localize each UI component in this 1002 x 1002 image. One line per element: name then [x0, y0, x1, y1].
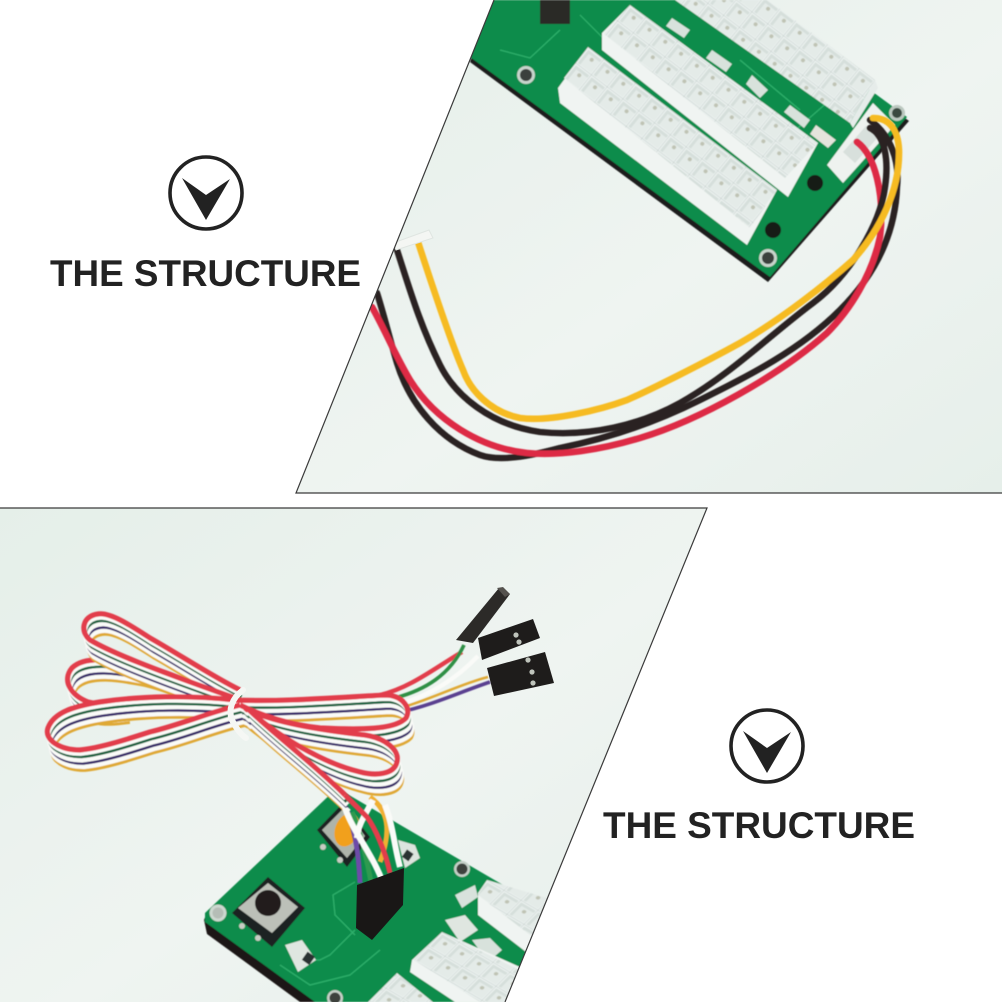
tactile button front — [232, 877, 305, 947]
white connectors — [477, 879, 532, 952]
heading block: top — [50, 157, 361, 294]
separated wires to header — [345, 795, 400, 887]
tactile button rear with orange cap — [317, 803, 370, 867]
panel: ribbon cable switch board photo — [0, 508, 708, 1002]
heading: the structure: THE STRUCTURE — [603, 805, 915, 846]
panel: power adapter board photo — [290, 0, 1002, 494]
connector 1 — [558, 47, 777, 245]
cables — [372, 118, 899, 458]
top photo border — [296, 0, 1002, 493]
dupont plugs — [456, 587, 554, 696]
heading: the structure: THE STRUCTURE — [50, 253, 361, 294]
photo background — [290, 0, 1002, 494]
photo background — [0, 508, 708, 1002]
heading block: bottom — [603, 710, 915, 846]
front loops — [47, 695, 413, 815]
rear loops — [68, 614, 245, 724]
cable tie — [230, 690, 246, 738]
connector 2 — [602, 5, 818, 197]
surface mount parts — [285, 940, 316, 972]
circuit board — [203, 792, 544, 1002]
icon: down arrow in circle — [731, 710, 803, 782]
ribbon cable — [47, 614, 490, 887]
separated wires to plugs — [380, 645, 490, 712]
circuit board — [470, 0, 909, 282]
icon: down arrow in circle — [170, 157, 242, 229]
header plug — [356, 868, 404, 940]
small white plug — [827, 103, 895, 183]
connector 3 — [675, 0, 875, 123]
loose cable plug — [393, 230, 433, 250]
bottom photo border — [0, 508, 707, 1002]
